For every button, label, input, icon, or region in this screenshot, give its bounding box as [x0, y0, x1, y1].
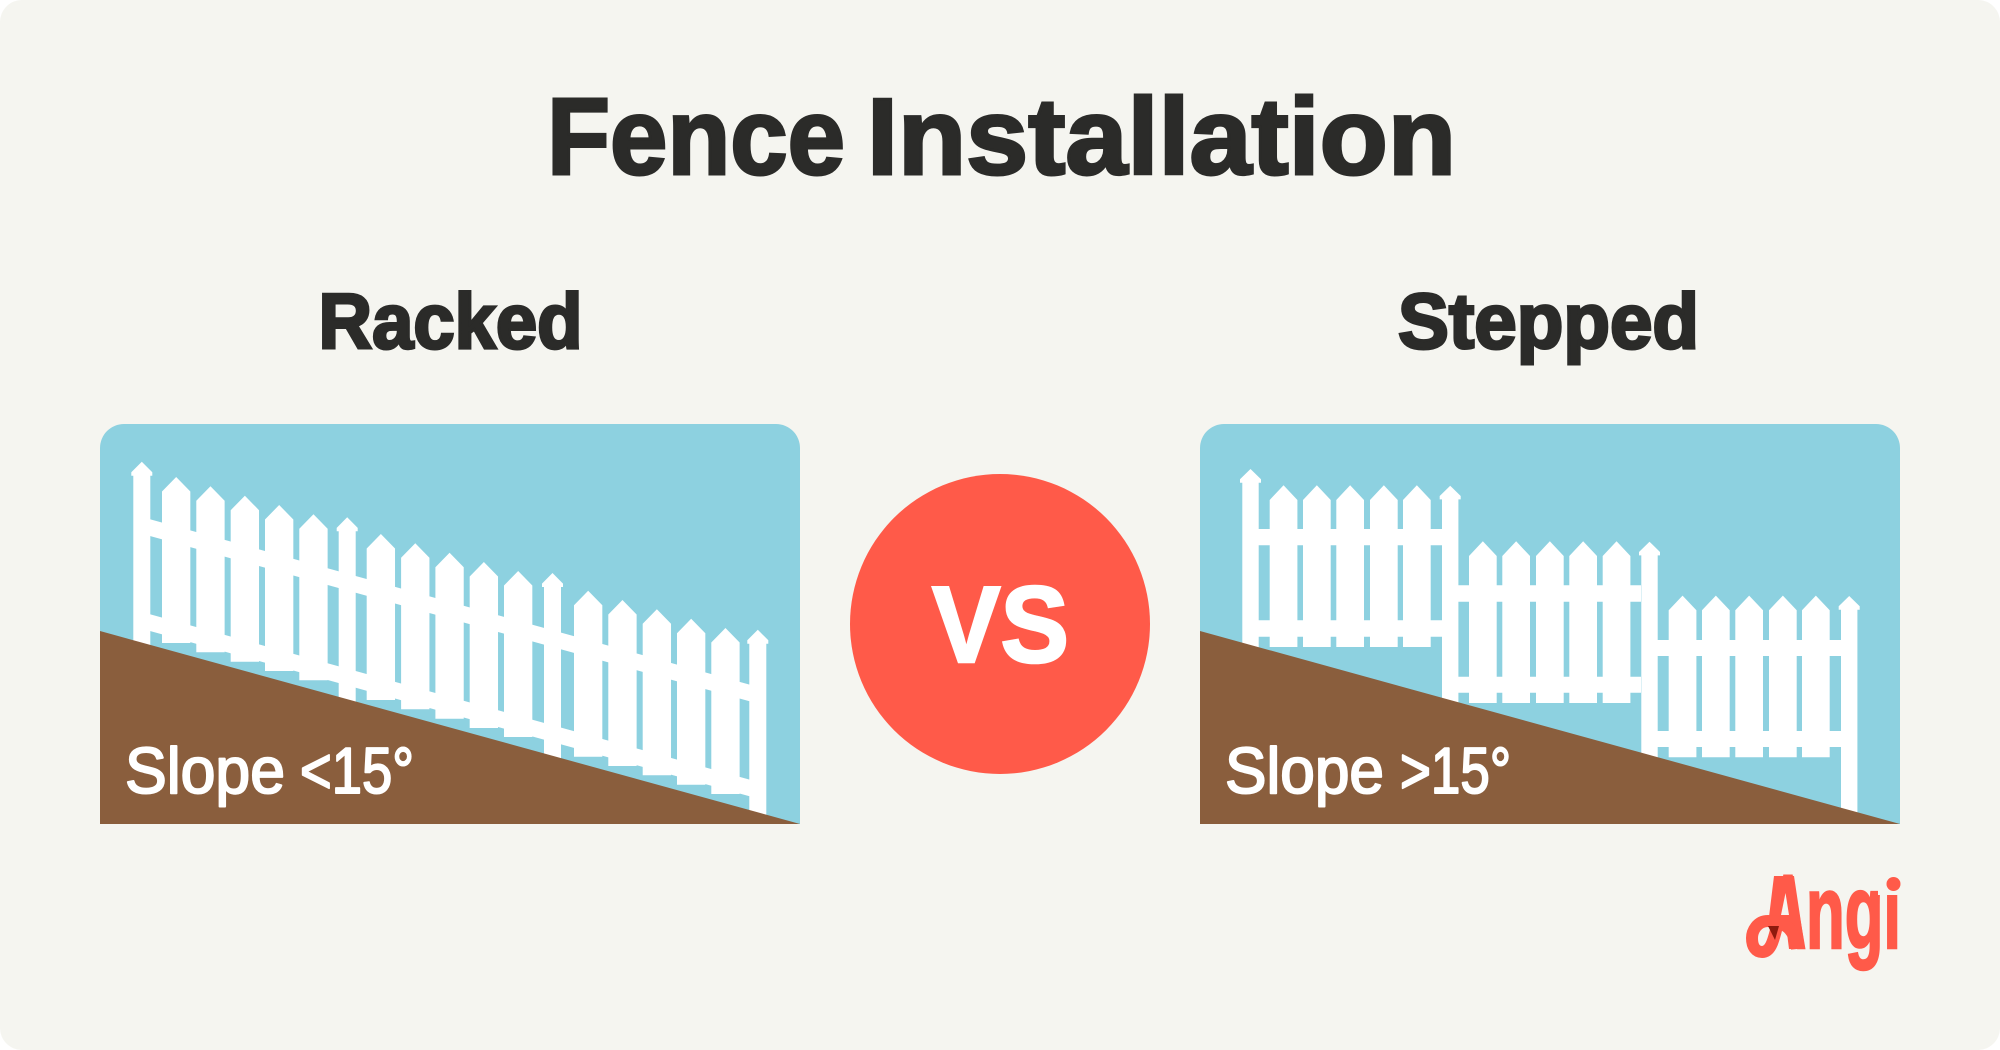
fence pickets: [162, 477, 740, 794]
slope label: >15°: [1400, 734, 1511, 807]
ground slope: [100, 631, 800, 824]
slope label: <15°: [300, 734, 414, 807]
panel: stepped fence: [1200, 424, 1900, 824]
fence posts: [131, 462, 768, 820]
logo loop: [1752, 921, 1797, 952]
logo A lower cover: [1755, 927, 1789, 953]
logo wordmark: [1770, 854, 1901, 971]
title: Fence: [547, 76, 845, 198]
fence rails: [1258, 529, 1841, 747]
logo tittle cover: [1878, 860, 1904, 895]
sky background: [100, 424, 800, 824]
slope label: [1225, 734, 1511, 807]
logo A legs: [1768, 876, 1805, 949]
slope label: [125, 734, 414, 807]
sky background: [1200, 424, 1900, 824]
slope label: Slope: [125, 734, 285, 807]
logo shadow: [1768, 926, 1779, 940]
heading: stepped: Stepped: [1398, 277, 1699, 365]
logo wordmark: ngi: [1806, 854, 1901, 971]
fence posts: [1240, 469, 1860, 820]
fence pickets: [1270, 485, 1830, 757]
fence rails: [150, 519, 750, 796]
panel: racked fence: [100, 424, 800, 824]
title: [547, 76, 1456, 198]
logo A counter: [1781, 893, 1789, 915]
logo dot: [1886, 877, 1900, 891]
ground slope: [1200, 631, 1900, 824]
logo: Angi: [1752, 854, 1904, 971]
title: Installation: [867, 76, 1456, 198]
vs badge: [850, 474, 1150, 774]
logo wordmark: A: [1770, 854, 1806, 971]
vs badge: VS: [932, 564, 1069, 686]
heading: racked: Racked: [318, 277, 582, 365]
slope label: Slope: [1225, 734, 1384, 807]
